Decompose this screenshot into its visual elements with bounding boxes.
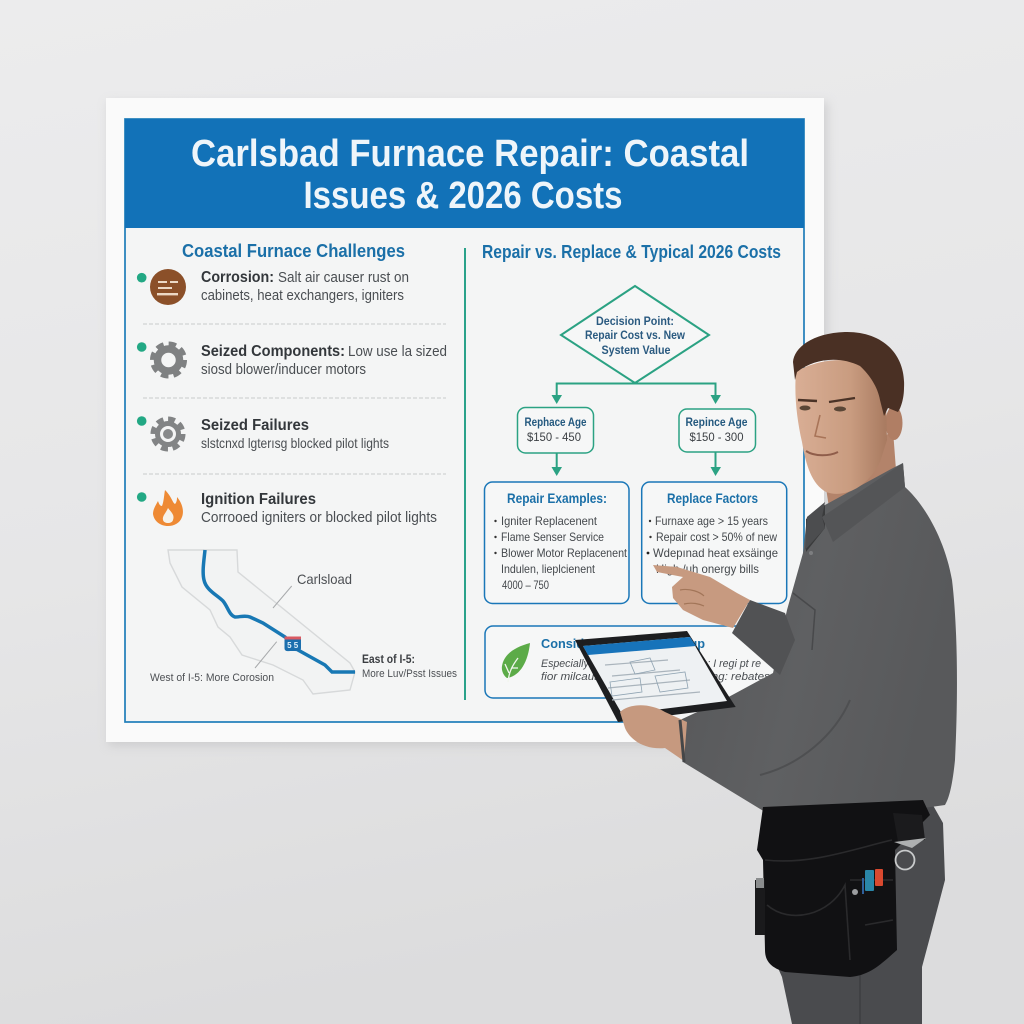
box: replace factors: High /uh onergy bills (656, 562, 759, 576)
item: ignition failures (137, 490, 437, 526)
box: replace cost: $150 - 300 (690, 430, 744, 444)
heading: left panel: Coastal Furnace Challenges (182, 241, 405, 261)
box: replace factors: Replace Factors (667, 490, 758, 506)
box: repair examples: Flame Senser Service (501, 530, 604, 544)
header: title banner (125, 119, 804, 228)
heading: right panel: Repair vs. Replace & Typical 2026 Costs (482, 242, 781, 262)
box: consider heat pump: fior milcaus, utility and local heating: rebates (541, 671, 771, 683)
tool: carabiner ring (893, 813, 926, 870)
cuff edge (680, 720, 684, 762)
header: title banner: Carlsbad Furnace Repair: Coastal (191, 133, 749, 175)
icon: I-5 shield (284, 636, 301, 651)
item: corrosion (137, 269, 409, 305)
poster panel (106, 98, 824, 742)
arrows: decision branches (552, 384, 721, 476)
poster shadow (108, 102, 828, 746)
box: replace cost: Repince Age (686, 415, 748, 429)
flowchart: decision diamond: Decision Point: (596, 314, 674, 328)
item: seized failures: Seized Failures (201, 417, 309, 434)
item: corrosion: cabinets, heat exchangers, igniters (201, 288, 404, 304)
box: replace cost (679, 409, 756, 452)
box: repair examples: Repair Examples: (507, 490, 607, 506)
tool pouch (755, 800, 930, 977)
box: repair cost (518, 408, 594, 453)
icon: leaf (502, 643, 530, 682)
flowchart: decision diamond (561, 286, 709, 383)
holding hand (620, 705, 687, 761)
item: seized failures: slstcnxd lgterısg blocked pilot lights (201, 435, 389, 451)
panel: coastal furnace challenges (137, 241, 457, 694)
box: replace factors: Furnaxe age > 15 years (655, 514, 768, 528)
item: seized components: siosd blower/inducer motors (201, 362, 366, 378)
chart: California map with I-5: Carlsload (297, 571, 352, 587)
box: replace factors: Repair cost > 50% of new (656, 530, 777, 544)
box: repair cost: $150 - 450 (527, 430, 581, 444)
box: replace factors (642, 482, 787, 604)
box: repair examples: Igniter Replacenent (501, 514, 598, 528)
chart: California map with I-5: East of I-5: (362, 652, 415, 666)
chart: California map with I-5 (150, 550, 457, 694)
box: repair examples: Blower Motor Replacenent (501, 546, 628, 560)
collar (805, 463, 905, 555)
item: seized components: Low use la sized (348, 344, 447, 360)
box: replace factors: Wdepınad heat exsäinge (653, 546, 778, 560)
box: repair examples: 4000 – 750 (502, 578, 549, 592)
trousers (770, 800, 945, 1024)
box: consider heat pump: Consider Heat Pump Setup (541, 636, 705, 651)
box: repair examples: Indulen, lieplcienent (501, 562, 596, 576)
box: consider heat pump (485, 626, 787, 698)
icon: I-5 shield: 5 5 (287, 641, 299, 650)
item: corrosion: Corrosion: (201, 269, 274, 286)
header: title banner: Issues & 2026 Costs (304, 175, 622, 217)
tool: side pocket tool (755, 880, 765, 935)
box: repair cost: Rephace Age (524, 415, 587, 429)
item: seized components (137, 342, 447, 378)
pointing hand (653, 565, 750, 628)
item: seized components: Seized Components: (201, 343, 345, 360)
tool: pens (862, 869, 883, 894)
item: seized failures (137, 416, 389, 451)
box: repair examples (484, 482, 629, 604)
chart: California map with I-5: More Luv/Psst Issues (362, 668, 457, 680)
tablet (575, 631, 736, 722)
shirt torso and lower sleeve (680, 463, 957, 813)
chart: California map with I-5: West of I-5: More Corosion (150, 672, 274, 684)
item: ignition failures: Ignition Failures (201, 491, 316, 508)
sleeve raised arm (732, 600, 795, 675)
item: ignition failures: Corrooed igniters or blocked pilot lights (201, 510, 437, 526)
panel: repair vs replace (482, 242, 787, 698)
head (793, 332, 904, 494)
box: consider heat pump: Especially for older homes qualifies: I regi pt re (541, 658, 761, 670)
flowchart: decision diamond: System Value (602, 343, 671, 357)
item: corrosion: Salt air causer rust on (278, 270, 409, 286)
flowchart: decision diamond: Repair Cost vs. New (585, 328, 686, 342)
technician figure (575, 332, 957, 1024)
neck (826, 430, 896, 514)
